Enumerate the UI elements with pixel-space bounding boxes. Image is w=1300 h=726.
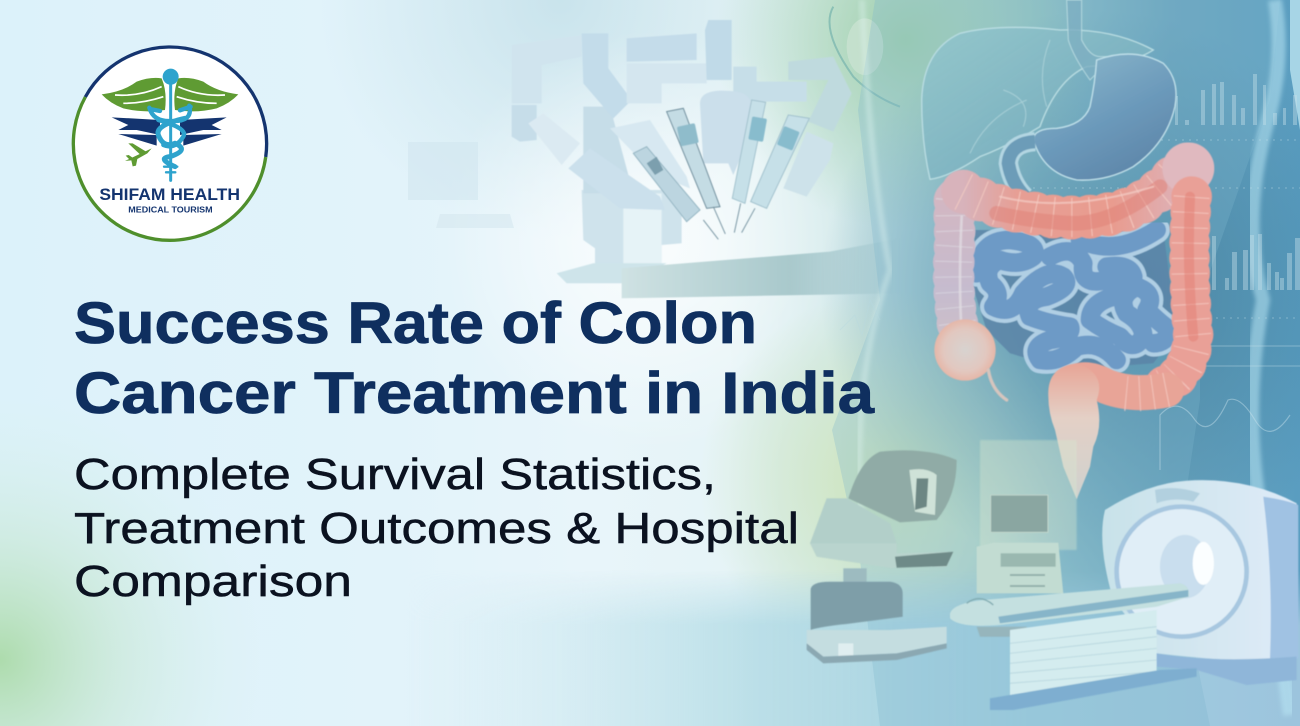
title: Success Rate of Colon (74, 291, 757, 356)
console unit (977, 495, 1063, 637)
robot upper arms (512, 20, 852, 142)
title (74, 291, 875, 426)
robot console (807, 450, 957, 663)
descending colon (1163, 197, 1193, 387)
sigmoid colon (1067, 380, 1167, 394)
illustration: small intestine (972, 230, 1177, 370)
illustration: surgical lamp (829, 7, 900, 107)
illustration: liver and stomach (922, 0, 1176, 197)
subtitle: Complete Survival Statistics, (74, 450, 716, 499)
stomach (1033, 54, 1176, 180)
illustration: translucent torso (832, 0, 1300, 726)
subtitle: Comparison (74, 557, 352, 606)
airplane icon (125, 143, 152, 166)
illustration: medical equipment (807, 440, 1298, 710)
lower wings, navy (112, 117, 227, 146)
caduceus staff and snakes (149, 69, 191, 180)
subtitle (74, 450, 799, 606)
robot base and column (557, 107, 682, 283)
robot instrument arms (528, 91, 833, 239)
subtitle: Treatment Outcomes & Hospital (74, 504, 799, 553)
liver (922, 27, 1153, 179)
logo ring (73, 47, 267, 240)
rectum (1048, 363, 1099, 499)
operating table (622, 238, 900, 298)
background wall panel (980, 440, 1077, 550)
illustration: colon (934, 142, 1214, 499)
transverse colon (963, 142, 1214, 223)
ascending colon (934, 197, 1007, 400)
logo badge (73, 47, 267, 240)
illustration: background monitor (408, 142, 514, 228)
duodenum (1008, 142, 1035, 197)
CT scanner (1102, 480, 1298, 685)
logo text: company name: SHIFAM HEALTH (99, 185, 240, 204)
chart overlays (840, 74, 1300, 470)
caduceus wings, green (102, 78, 238, 111)
illustration: surgical robot (512, 20, 900, 298)
esophagus (1067, 0, 1113, 80)
CT patient table (950, 583, 1197, 710)
logo text: tagline: MEDICAL TOURISM (128, 205, 213, 214)
title: Cancer Treatment in India (74, 361, 875, 426)
